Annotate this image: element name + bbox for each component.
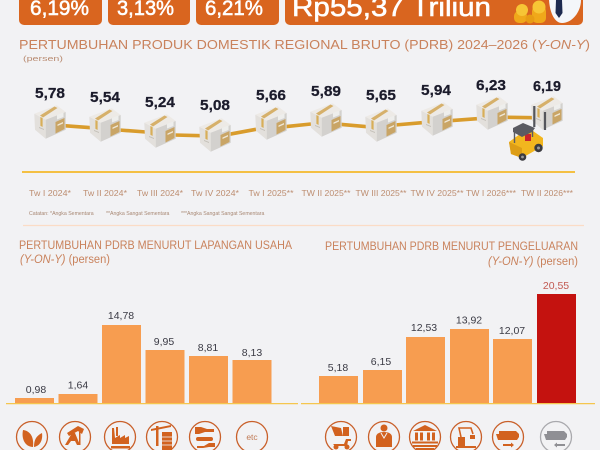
bar chart: expenditure: 20,55 [543,280,569,292]
icon: etc [236,422,268,450]
quarter labels: Tw III 2024* [137,189,183,198]
heading: by business field [19,238,292,266]
icon: construction [146,422,178,450]
quarter labels: Tw II 2024* [83,189,127,198]
icon: agriculture leaves [16,422,48,450]
values: 5,08 [200,97,230,114]
heading: by expenditure: (Y-ON-Y) (persen) [488,256,578,268]
values [35,77,561,114]
quarter labels: TW II 2025** [302,189,350,198]
quarter labels: Tw I 2024* [29,189,71,198]
stat tile: 6,19% [19,0,102,25]
stat tile: 6,21% [196,0,279,25]
icon: government building [410,422,440,450]
footnote: **Angka Sangat Sementara [106,211,170,217]
icon: export ship [492,422,524,450]
icon: investment robot arm [450,422,482,450]
heading: by business field: PERTUMBUHAN PDRB MENURUT LAPANGAN USAHA [19,238,292,252]
axis [22,171,575,173]
icon: oil pump [60,422,90,450]
heading: by expenditure [325,239,578,268]
bar chart: expenditure: 13,92 [456,314,482,326]
quarter labels: TW IV 2025** [410,189,464,198]
values: 5,66 [256,87,286,104]
quarter labels: TW II 2026*** [521,189,573,198]
icon: non-profit person [368,422,400,450]
icon: import ship [540,422,572,450]
values: 5,24 [145,94,176,111]
values: 5,94 [421,82,452,99]
bar chart: business field: 8,81 [198,342,218,354]
icon: hands trade [190,422,220,450]
values: 5,65 [366,87,396,104]
boxes [34,96,563,152]
footnote: ***Angka Sangat Sangat Sementara [181,211,264,217]
icon: household shopping [326,422,356,450]
bar chart: business field: 0,98 [26,384,46,396]
footnote: Catatan: *Angka Sementara [29,211,94,217]
values: 5,78 [35,85,65,102]
icon: factory [104,422,136,450]
bar chart: business field: 14,78 [108,310,134,322]
stat tile: 3,13% [108,0,190,25]
icon: etc: etc [246,432,258,442]
values: 6,19 [533,78,561,95]
icon: forklift [509,106,545,161]
bar chart: business field: 8,13 [242,347,262,359]
bar chart: business field: 1,64 [68,380,88,392]
unit note: (persen) [23,54,64,63]
quarter labels: Tw I 2025** [248,189,294,198]
stat tile: Rp55,37 Triliun [285,0,583,25]
quarter labels: TW III 2025** [356,189,406,198]
bar chart: expenditure: 6,15 [371,356,391,368]
quarter labels: Tw IV 2024* [191,189,239,198]
bar chart: business field [6,310,298,404]
bar chart: expenditure: 12,07 [499,325,525,337]
quarter labels [29,189,573,198]
title: PDRB growth: PERTUMBUHAN PRODUK DOMESTIK REGIONAL BRUTO (PDRB) 2024–2026 ( Y-ON-Y ) [19,37,590,52]
trend line [64,117,533,136]
quarter labels: TW I 2026*** [466,189,516,198]
values: 5,54 [90,89,121,106]
bar chart: expenditure: 5,18 [328,362,348,374]
heading: by business field: (Y-ON-Y) (persen) [20,254,110,266]
bar chart: expenditure [301,280,595,404]
bar chart: expenditure: 12,53 [411,322,437,334]
values: 5,89 [311,83,341,100]
bar chart: business field: 9,95 [154,336,174,348]
icon: businessman and coins [514,0,581,24]
values: 6,23 [476,77,506,94]
line chart: quarterly growth [22,77,575,198]
